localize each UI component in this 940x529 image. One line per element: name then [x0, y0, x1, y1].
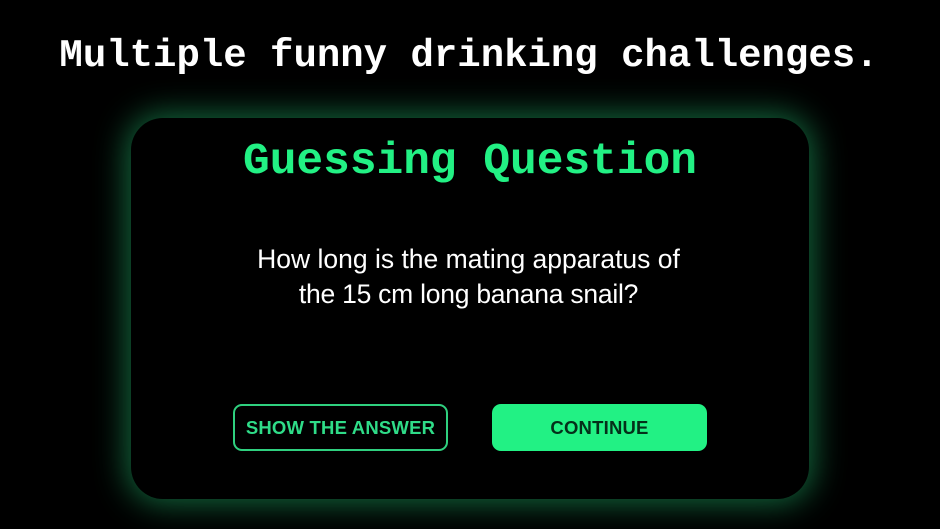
question text: the 15 cm long banana snail? — [299, 278, 638, 308]
title: Multiple funny drinking challenges. — [59, 34, 879, 78]
question text: How long is the mating apparatus of — [257, 244, 680, 274]
button: show the answer: SHOW THE ANSWER — [246, 417, 435, 438]
panel: question card — [131, 118, 809, 499]
button: show the answer — [233, 404, 448, 451]
question text — [257, 244, 680, 308]
card heading: Guessing Question — [243, 137, 697, 187]
button: continue — [492, 404, 707, 451]
button: continue: CONTINUE — [550, 417, 649, 438]
